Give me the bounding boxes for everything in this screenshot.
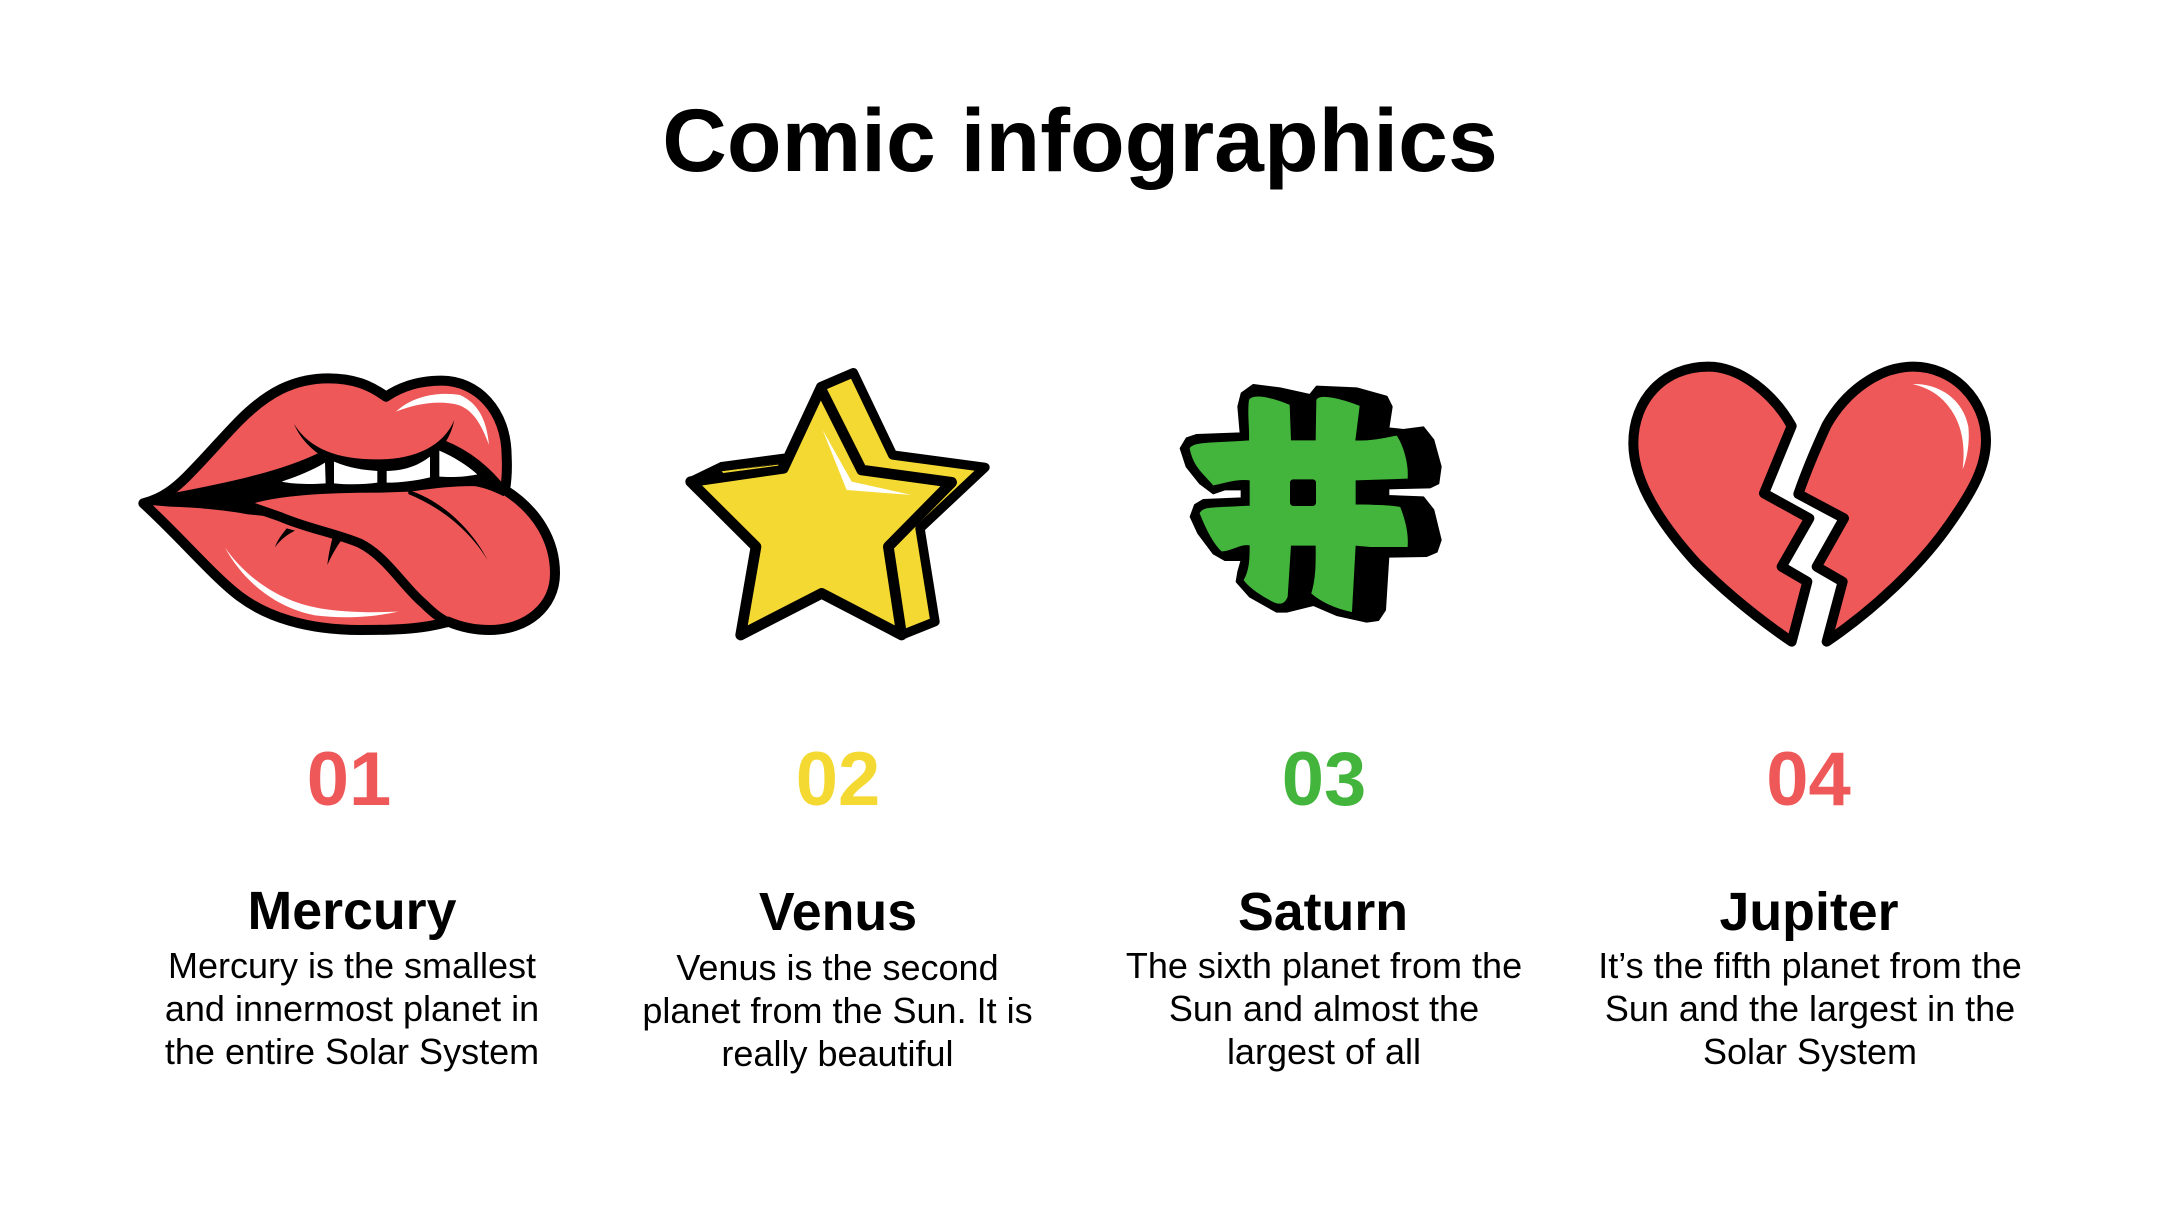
heading: Mercury: Mercury [248,881,456,941]
number 03: 03 [1282,737,1366,822]
icon: 3D star [685,368,990,640]
text: Mercury description: Mercury is the smallest [168,945,536,986]
text: Mercury description: the entire Solar System [165,1031,539,1072]
text: Venus description: Venus is the second [676,947,999,988]
text: Saturn description: largest of all [1227,1031,1421,1072]
text: Saturn description: Sun and almost the [1169,988,1479,1029]
text: Venus description: really beautiful [721,1033,954,1074]
text: Mercury description: and innermost planet in [165,988,539,1029]
text: Jupiter description: It’s the fifth planet from the [1598,945,2022,986]
heading: Saturn: Saturn [1238,882,1408,942]
text: Jupiter description: Solar System [1703,1031,1917,1072]
text: Jupiter description [1598,945,2022,1072]
icon: hash symbol [1180,384,1442,623]
text: Venus description: planet from the Sun. It is [642,990,1033,1031]
heading: Venus: Venus [759,882,917,942]
icon: lips with tongue [138,373,560,635]
heading: Jupiter: Jupiter [1720,882,1898,942]
number 04: 04 [1766,737,1851,822]
icon: broken heart [1628,362,1991,647]
number 02: 02 [796,737,880,822]
text: Venus description [642,947,1033,1074]
text: Saturn description [1126,945,1522,1072]
text: Jupiter description: Sun and the largest in the [1605,988,2015,1029]
text: Saturn description: The sixth planet from the [1126,945,1522,986]
title: Comic infographics [662,90,1498,190]
number 01: 01 [307,737,391,822]
text: Mercury description [165,945,539,1072]
